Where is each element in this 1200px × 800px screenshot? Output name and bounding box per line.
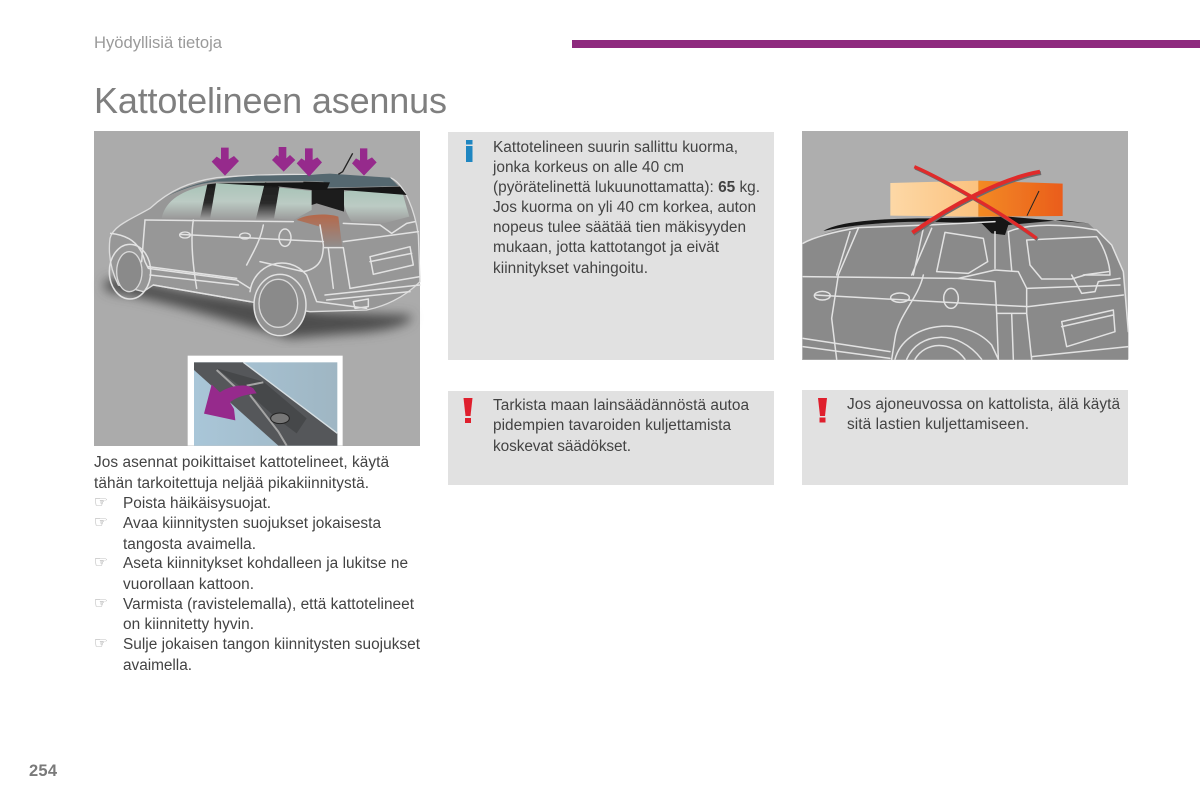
windows (162, 185, 207, 218)
title: Kattotelineen asennus (94, 80, 447, 121)
icon: warning (818, 398, 827, 422)
instructions text block: Sulje jokaisen tangon kiinnitysten suojukset (123, 636, 421, 653)
section header: Hyödyllisiä tietoja (94, 33, 223, 52)
bullet icons: ☞ (94, 554, 108, 571)
red cross (912, 167, 1041, 240)
warning text: sitä lastien kuljettamiseen. (847, 416, 1029, 433)
info text (492, 139, 760, 277)
bullet icons: ☞ (94, 635, 108, 652)
antenna (1027, 191, 1039, 216)
instructions text block: Varmista (ravistelemalla), että kattotelineet (123, 596, 415, 613)
outlines (111, 233, 250, 288)
roof rail (823, 217, 1088, 235)
warning text: Tarkista maan lainsäädännöstä autoa (493, 397, 749, 414)
info text: mukaan, jotta kattotangot ja eivät (493, 239, 720, 256)
cargo box (890, 181, 1063, 217)
info text: kiinnitykset vahingoitu. (493, 260, 648, 277)
warning text (493, 397, 749, 455)
warning text (847, 396, 1120, 433)
warning text: pidempien tavaroiden kuljettamista (493, 417, 731, 434)
instructions text block: Avaa kiinnitysten suojukset jokaisesta (123, 515, 381, 532)
warning text: koskevat säädökset. (493, 438, 631, 455)
icon: warning (464, 398, 472, 423)
icon: info (466, 140, 472, 162)
info text: jonka korkeus on alle 40 cm (492, 159, 684, 176)
pillars (200, 183, 216, 218)
tail light (297, 214, 342, 248)
inset: clip detail (188, 356, 343, 446)
info text: (pyörätelinettä lukuunottamatta): 65 kg. (493, 179, 760, 196)
header bar (572, 40, 1200, 48)
warning panel: roof strip (802, 390, 1128, 485)
bullet icons: ☞ (94, 514, 108, 531)
instructions text block: Poista häikäisysuojat. (123, 495, 271, 512)
purple arrows (212, 147, 377, 177)
instructions text block: Aseta kiinnitykset kohdalleen ja lukitse ne (123, 555, 408, 572)
instructions text block: on kiinnitetty hyvin. (123, 616, 254, 633)
car shadow (104, 278, 411, 338)
info panel (448, 132, 774, 360)
instructions text block (94, 454, 421, 674)
instructions text block: vuorollaan kattoon. (123, 576, 254, 593)
photo: overloaded car crossed out (802, 131, 1128, 360)
warning text: Jos ajoneuvossa on kattolista, älä käytä (847, 396, 1120, 413)
roof (167, 174, 398, 197)
instructions text block: Jos asennat poikittaiset kattotelineet, käytä (94, 454, 389, 471)
bullet icons: ☞ (94, 595, 108, 612)
instructions text block: tähän tarkoitettuja neljää pikakiinnitystä. (94, 475, 369, 492)
antenna (338, 153, 353, 174)
photo: car with roof rack mounting points (94, 131, 420, 446)
instructions text block: tangosta avaimella. (123, 536, 256, 553)
car body (109, 174, 420, 312)
bullet icons: ☞ (94, 494, 108, 511)
info text: nopeus tulee säätää tien mäkisyyden (493, 219, 746, 236)
info text: Jos kuorma on yli 40 cm korkea, auton (493, 199, 756, 216)
info text: Kattotelineen suurin sallittu kuorma, (493, 139, 738, 156)
warning panel: legislation (448, 391, 774, 485)
outlines (803, 222, 1128, 332)
instructions text block: avaimella. (123, 657, 192, 674)
car body (803, 218, 1128, 359)
page number: 254 (29, 762, 58, 780)
bullet icons (94, 494, 108, 652)
magenta curved arrow (204, 384, 257, 420)
